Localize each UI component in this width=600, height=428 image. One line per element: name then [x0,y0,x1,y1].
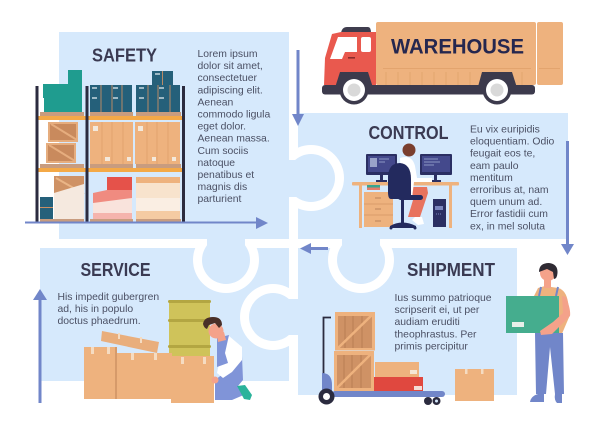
arrow: control down [561,141,574,255]
books [367,185,380,190]
puzzle background [40,32,568,395]
crates [334,312,375,391]
text: control: erroribus at, nam [470,185,549,196]
text: shipment: Ius summo patrioque [394,293,492,304]
text: control: feugait eos te, [470,149,535,160]
desk [352,182,459,228]
text: safety: consectetuer [198,73,258,84]
barrel [168,300,211,357]
heading: service: SERVICE [80,259,150,280]
small teal box [40,197,53,219]
panel: control [298,113,568,239]
text: safety: eget dolor. [198,122,246,133]
puzzle joint: control to shipment [328,239,394,293]
text: control: mentitum [470,173,513,184]
teal boxes [43,70,82,112]
cardboard boxes [90,122,180,164]
orange shelf beams [38,116,182,172]
heading: safety: SAFETY [92,44,158,66]
puzzle joint: safety to service [193,239,259,293]
text: safety: commodo ligula [198,110,270,120]
dark blue boxes [90,71,180,112]
truck cab [324,27,376,85]
pallets top [40,112,181,116]
text: service: doctus phaedrum. [58,316,141,327]
drawers [364,192,393,227]
pallets bottom [40,219,181,222]
cart wheels [318,388,440,405]
arrow: down to control [292,50,304,126]
cart base [322,373,445,397]
arrow: shipment left [300,243,328,254]
panel: safety [59,32,289,239]
pallets middle [40,164,181,168]
worker head [539,263,558,288]
illustration: warehouse shelves [36,70,185,222]
illustration: worker holding box [506,263,570,403]
text: safety: dolor sit amet, [198,61,263,72]
worker body [530,286,570,403]
wooden crates [46,122,78,163]
heading: control: CONTROL [368,122,448,143]
arrow: service up [33,289,47,403]
wrapped peach box [136,177,180,219]
text: control: quem unum ad. [470,197,542,208]
text: safety: adipiscing elit. [198,85,263,96]
text: service: His impedit gubergren [58,292,159,303]
truck chassis [322,72,535,94]
puzzle joint: safety to control [289,145,344,211]
text: shipment: scripserit ei, ut per [394,305,480,316]
text: safety: penatibus et [198,170,254,181]
standing box [455,369,494,401]
text: service: ad, his in populo [58,304,133,315]
arrow: safety right [25,217,268,229]
illustration: pallet truck with crates [318,312,494,405]
text: shipment: theophrastus. Per [394,329,477,340]
text: safety: magnis dis [198,182,247,193]
text: control: ex, in mel soluta [470,221,545,232]
cardboard boxes [84,331,214,403]
illustration: worker packing boxes [84,300,252,403]
worker arm [540,296,570,335]
worker [400,144,432,225]
wrapped crate [54,176,84,219]
text: safety: natoque [198,158,235,169]
heading: shipment: SHIPMENT [407,259,496,280]
truck with warehouse label [322,22,563,104]
text: shipment: primis percipitur [394,341,468,352]
handle [324,318,331,375]
computer tower [433,199,446,227]
heading: warehouse: WAREHOUSE [391,36,524,58]
worker kneeling [203,317,252,400]
stacked boxes [374,362,423,391]
truck wheels [340,76,512,104]
text: safety: Aenean [198,97,234,108]
text: safety: parturient [198,194,242,205]
panel: shipment [298,248,517,395]
shelf uprights [36,86,185,222]
office chair [388,163,423,230]
text: control: Eu vix euripidis [470,124,540,136]
text: service [58,292,159,327]
text: safety: Lorem ipsum [198,49,258,60]
monitors [366,154,452,182]
text: safety: Aenean massa. [198,134,270,145]
illustration: office worker at desk [352,144,459,230]
panel: service [40,248,289,381]
wrapped red box [93,177,132,219]
text: control: eloquentiam. Odio [470,137,555,148]
text: control: eam paulo [470,161,519,172]
text: safety [198,49,270,205]
text: control [470,124,555,232]
worker hand [212,376,218,384]
text: shipment: audiam eruditi [394,317,460,328]
text: shipment [394,293,492,352]
text: control: Error fastidii cum [470,209,548,220]
text: safety: Cum sociis [198,146,248,157]
truck cargo [376,22,563,85]
green box [506,296,559,333]
puzzle joint: shipment to service [240,284,298,350]
